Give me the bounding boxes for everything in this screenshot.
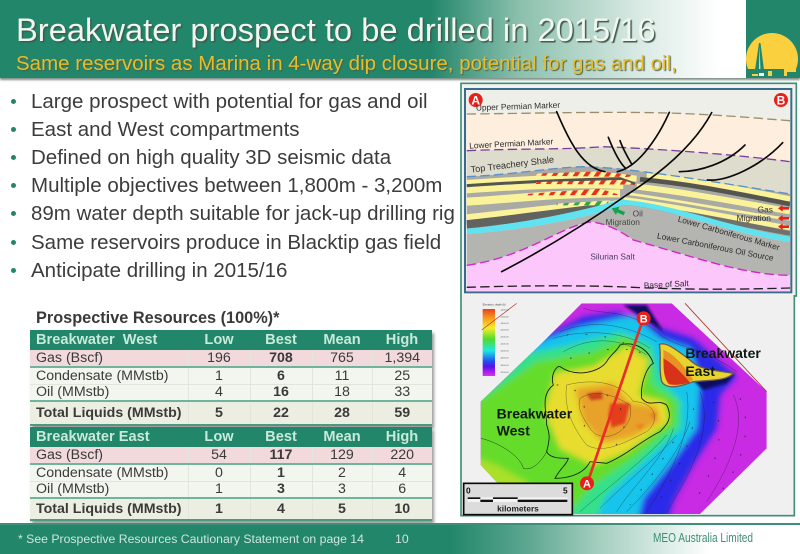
bullet list: 89m water depth suitable for jack-up drilling rig: [31, 202, 455, 225]
legend: -1800.00: [500, 323, 509, 325]
table: Breakwater West: 59: [394, 405, 410, 421]
marker B: [774, 93, 788, 107]
marker B: B: [777, 93, 786, 107]
table: Breakwater West: 28: [334, 405, 350, 421]
cyan marker band: [467, 199, 790, 242]
icon: company logo: [746, 0, 800, 78]
bullet list: Same reservoirs produce in Blacktip gas field: [31, 231, 441, 254]
section line A-B: A: [583, 478, 591, 490]
table: Breakwater East: 0: [215, 465, 223, 481]
table: Breakwater East: 129: [330, 447, 354, 463]
table: Breakwater East: High: [386, 429, 418, 445]
table: Breakwater East: 3: [277, 481, 285, 497]
legend: -2400.00: [500, 344, 509, 346]
bullet list: Multiple objectives between 1,800m - 3,200m: [31, 174, 442, 197]
table: Breakwater West: Mean: [323, 332, 361, 348]
section line A-B: B: [640, 313, 648, 325]
table: Breakwater East: 1: [215, 501, 223, 517]
table: Breakwater West: 11: [335, 368, 349, 384]
table: Breakwater East: Best: [265, 429, 297, 445]
hatched oil zone: [557, 201, 608, 205]
table: Breakwater East: 4: [398, 465, 406, 481]
table: Breakwater East: [30, 427, 432, 521]
table: Breakwater East: 1: [277, 465, 285, 481]
reservoir strata: [467, 167, 790, 240]
table: Breakwater West: 765: [330, 350, 354, 366]
salt layer: [467, 222, 790, 293]
legend: -3200.00: [500, 372, 509, 374]
arrows: gas migration: [778, 205, 789, 230]
scale bar: kilometers: [497, 504, 539, 514]
layer labels: Migration: [606, 217, 640, 227]
legend: -2200.00: [500, 337, 509, 339]
oil source layer: [467, 205, 790, 275]
layer labels: [469, 100, 781, 290]
color surface: [480, 303, 767, 514]
map labels: East: [685, 363, 715, 379]
header band: [0, 0, 800, 78]
table heading: Prospective Resources (100%)*: [36, 309, 279, 327]
table: Breakwater West: [30, 330, 432, 426]
legend: -1600.00: [500, 317, 509, 319]
table: Breakwater East: 6: [398, 481, 406, 497]
table: Breakwater East: Mean: [323, 429, 361, 445]
marker A: A: [471, 93, 480, 107]
marker dashed lines: [467, 112, 790, 289]
table: Breakwater West: Condensate (MMstb): [36, 368, 168, 384]
table: Breakwater West: Breakwater West: [36, 332, 157, 348]
lower permian layer: [467, 147, 790, 195]
panel: cross-section diagram: [460, 82, 798, 297]
table: Breakwater West: 708: [269, 350, 293, 366]
table: Breakwater West: Oil (MMstb): [36, 384, 109, 400]
bullet list: East and West compartments: [31, 118, 300, 141]
legend: -2000.00: [500, 330, 509, 332]
map labels: [497, 345, 761, 438]
layer labels: Migration: [737, 213, 771, 223]
table: Breakwater West: 5: [215, 405, 223, 421]
map labels: West: [497, 422, 530, 438]
legend: [482, 303, 517, 376]
company name: MEO Australia Limited: [653, 530, 753, 545]
table: Breakwater West: 196: [207, 350, 231, 366]
footer band: [0, 523, 800, 554]
panel: structure depth map: [460, 295, 796, 516]
layer labels: Oil: [633, 208, 643, 218]
section line A-B: [580, 311, 651, 490]
table: Breakwater East: Total Liquids (MMstb): [36, 501, 182, 517]
table: Breakwater East: Breakwater East: [36, 429, 150, 445]
table: Breakwater West: 1,394: [384, 350, 420, 366]
legend: -3000.00: [500, 365, 509, 367]
table: Breakwater West: Low: [204, 332, 234, 348]
table: Breakwater East: 1: [215, 481, 223, 497]
bullet list: Anticipate drilling in 2015/16: [31, 259, 287, 282]
layer labels: Upper Permian Marker: [476, 100, 560, 113]
table: Breakwater East: 3: [338, 481, 346, 497]
table: Breakwater West: Total Liquids (MMstb): [36, 405, 182, 421]
faults: [502, 112, 783, 272]
layer labels: Lower Carboniferous Oil Source: [656, 230, 775, 263]
table: Breakwater West: 1: [215, 368, 223, 384]
layer labels: Base of Salt: [644, 278, 690, 290]
table: Breakwater East: Oil (MMstb): [36, 481, 109, 497]
footnote: * See Prospective Resources Cautionary Statement on page 14: [18, 532, 364, 546]
legend: -2600.00: [500, 351, 509, 353]
table: Breakwater West: Best: [265, 332, 297, 348]
table: Breakwater East: 220: [390, 447, 414, 463]
table: Breakwater West: Gas (Bscf): [36, 350, 103, 366]
small contour ticks: [557, 334, 746, 508]
legend: -2800.00: [500, 358, 509, 360]
table: Breakwater East: 54: [211, 447, 227, 463]
table: Breakwater West: High: [386, 332, 418, 348]
Breakwater East high: [659, 344, 733, 387]
table: Breakwater West: 33: [394, 384, 410, 400]
table: Breakwater West: 18: [334, 384, 350, 400]
table: Breakwater East: 4: [277, 501, 285, 517]
layer labels: Silurian Salt: [590, 251, 635, 261]
bullet list: [11, 90, 455, 282]
fault line: [685, 303, 767, 392]
map labels: Breakwater: [685, 345, 761, 361]
page number: 10: [395, 532, 409, 546]
layer labels: Top Treachery Shale: [470, 154, 555, 175]
legend: -1400.00: [500, 309, 509, 311]
table: Breakwater West: 6: [277, 368, 285, 384]
title: Breakwater prospect to be drilled in 2015/16: [16, 11, 656, 48]
table: Breakwater East: 117: [270, 447, 292, 463]
table: Breakwater East: Low: [204, 429, 234, 445]
layer labels: Lower Permian Marker: [469, 136, 554, 151]
table: Breakwater West: 16: [273, 384, 289, 400]
subtitle: Same reservoirs as Marina in 4-way dip closure, potential for gas and oil,: [16, 52, 677, 75]
map labels: Breakwater: [497, 406, 573, 422]
scale bar: 5: [563, 486, 568, 496]
table: Breakwater East: Gas (Bscf): [36, 447, 103, 463]
layer labels: Gas: [758, 204, 773, 214]
closure outline: [545, 344, 669, 478]
table: Breakwater East: 2: [338, 465, 346, 481]
table: Breakwater West: 25: [394, 368, 410, 384]
peach layer: [467, 112, 790, 162]
table: Breakwater East: Condensate (MMstb): [36, 465, 168, 481]
table: Breakwater East: 10: [394, 501, 410, 517]
hatched gas zones: [536, 171, 637, 177]
arrow: oil migration: [612, 207, 625, 215]
table: Breakwater East: 5: [338, 501, 346, 517]
contour lines: [553, 308, 739, 512]
table: Breakwater West: 22: [273, 405, 289, 421]
table: Breakwater West: 4: [215, 384, 223, 400]
marker A: [469, 93, 483, 107]
layer labels: Lower Carboniferous Marker: [677, 214, 781, 252]
legend: Elevation: depth (ft): [483, 303, 506, 307]
bullet list: Large prospect with potential for gas and oil: [31, 90, 428, 113]
bullet list: Defined on high quality 3D seismic data: [31, 146, 391, 169]
scale bar: 0: [466, 486, 471, 496]
scale bar: [464, 483, 572, 515]
